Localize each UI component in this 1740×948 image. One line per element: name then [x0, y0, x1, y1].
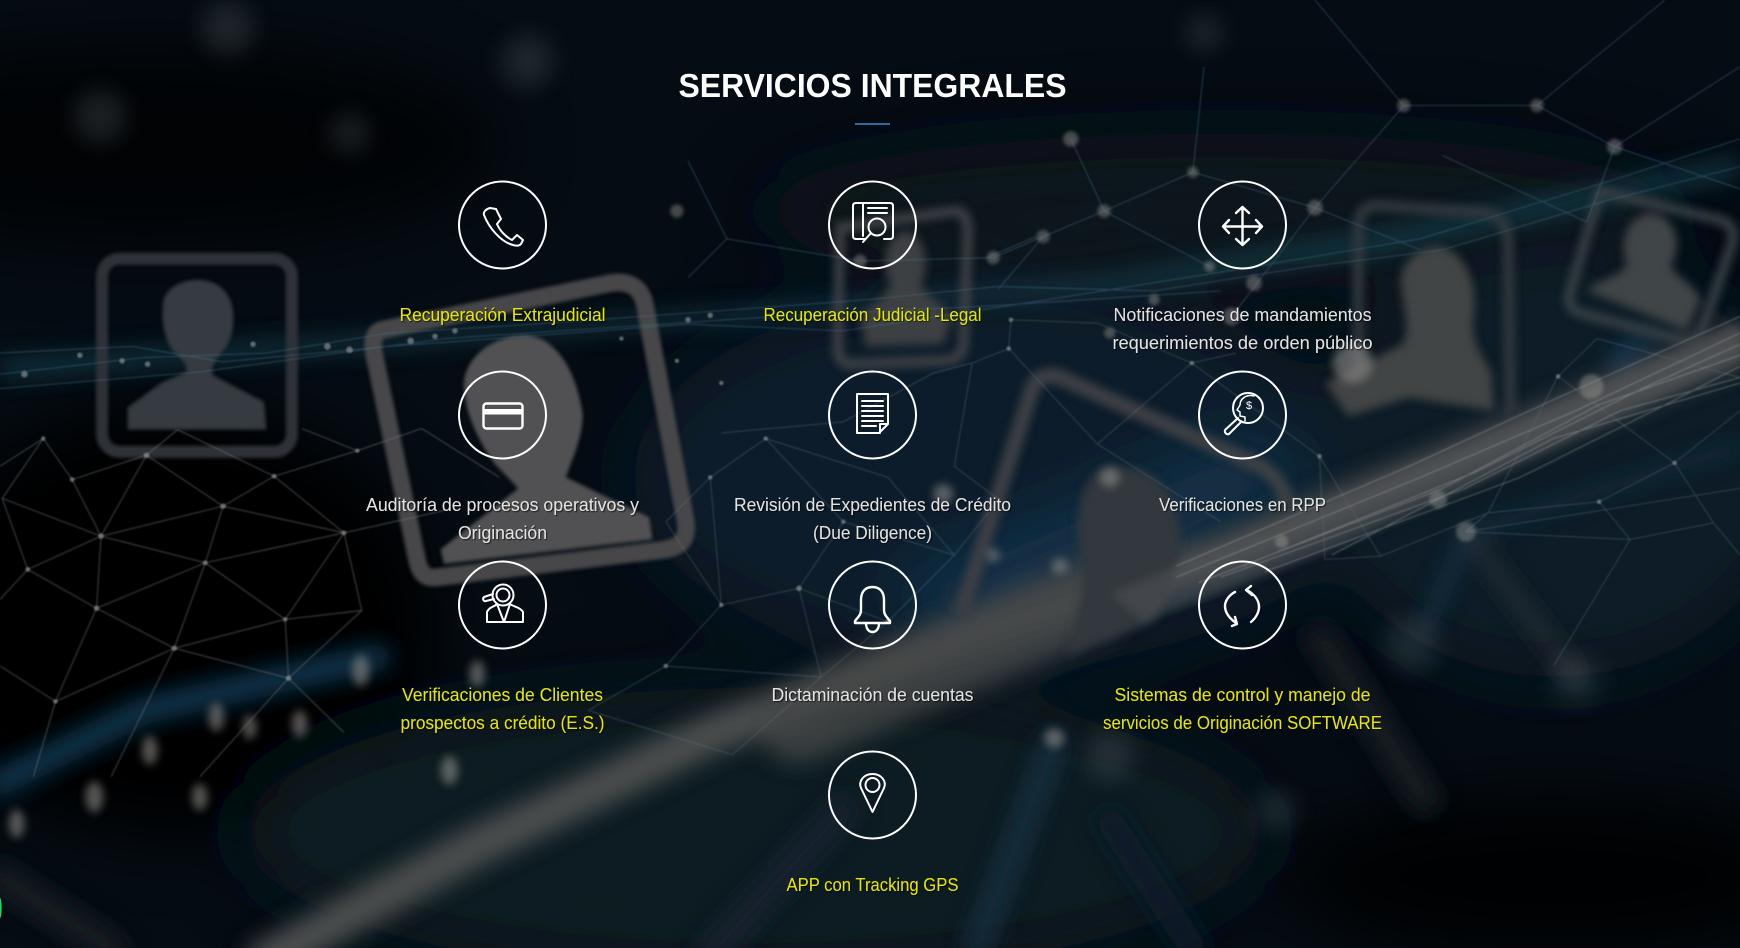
circle: [1199, 372, 1286, 458]
circle: [459, 562, 546, 648]
network nodes: [21, 313, 1677, 704]
circle: [829, 372, 916, 458]
label: Recuperación Extrajudicial: [400, 305, 606, 325]
circle: [459, 182, 546, 268]
label line 2: Originación: [458, 523, 547, 543]
left profile frame: [102, 259, 292, 452]
service: Recuperación Extrajudicial: [400, 182, 606, 325]
large tilted profile frame: [373, 282, 686, 578]
circle: [829, 562, 916, 648]
icon: refresh arrows: [1225, 586, 1259, 626]
label: Notificaciones de mandamientos: [1114, 305, 1372, 325]
lower center tilted frame: [961, 376, 1286, 655]
blurred foreground nodes: [9, 343, 1373, 838]
service: Verificaciones en RPP: [1159, 372, 1326, 515]
network lines: center and right mesh: [588, 320, 1740, 755]
icon: magnifier with dollar head: [1225, 393, 1263, 434]
label: Sistemas de control y manejo de: [1114, 685, 1370, 705]
icon: four-way arrows: [1223, 207, 1262, 245]
teal band across the upper middle: [0, 156, 1740, 380]
icon: card: [484, 404, 522, 428]
service: Revisión de Expedientes: [734, 372, 1011, 543]
circle: [1199, 562, 1286, 648]
icon: bell: [855, 587, 890, 632]
label: Dictaminación de cuentas: [772, 685, 974, 705]
circle: [829, 752, 916, 838]
label line 2: requerimientos de orden público: [1112, 333, 1372, 353]
service: APP con Tracking GPS: [786, 752, 958, 895]
service: Auditoría: [366, 372, 639, 543]
icon: phone: [484, 208, 523, 246]
green edge marker: [0, 898, 2, 918]
circle: [1199, 182, 1286, 268]
icon: agent with headset: [483, 584, 523, 622]
label: Revisión de Expedientes de Crédito: [734, 495, 1011, 515]
circle: [459, 372, 546, 458]
icon: map pin: [860, 774, 885, 812]
label: APP con Tracking GPS: [786, 875, 958, 895]
service: Recuperación Judicial -Legal: [764, 182, 982, 325]
label line 2: (Due Diligence): [813, 523, 932, 543]
label: Verificaciones de Clientes: [402, 685, 603, 705]
icon: magnifier with dollar head: $: [1246, 400, 1252, 412]
icon: book with magnifier: [853, 203, 893, 242]
title underline: [855, 123, 890, 125]
right profile frame: [1325, 205, 1510, 416]
network lines: left mesh: [0, 429, 499, 777]
label: Recuperación Judicial -Legal: [764, 305, 982, 325]
service: Notificaciones: [1112, 182, 1372, 353]
label: Verificaciones en RPP: [1159, 495, 1326, 515]
blurred large nodes: [670, 99, 1622, 548]
blurred diagonal streaks: [0, 336, 1740, 948]
label line 2: servicios de Originación SOFTWARE: [1103, 713, 1382, 733]
circle: [829, 182, 916, 268]
far right tilted frame: [1569, 191, 1733, 341]
bright diagonal data streak: [1110, 316, 1740, 622]
center small frame: [838, 211, 968, 364]
icon: document: [857, 394, 888, 433]
service: Verificaciones de Clientes: [400, 562, 604, 733]
title: SERVICIOS INTEGRALES: [678, 67, 1066, 104]
service: Sistemas de control: [1103, 562, 1382, 733]
service: Dictaminación de cuentas: [772, 562, 974, 705]
label line 2: prospectos a crédito (E.S.): [400, 713, 604, 733]
label: Auditoría de procesos operativos y: [366, 495, 639, 515]
network lines: upper area: [0, 0, 1740, 389]
